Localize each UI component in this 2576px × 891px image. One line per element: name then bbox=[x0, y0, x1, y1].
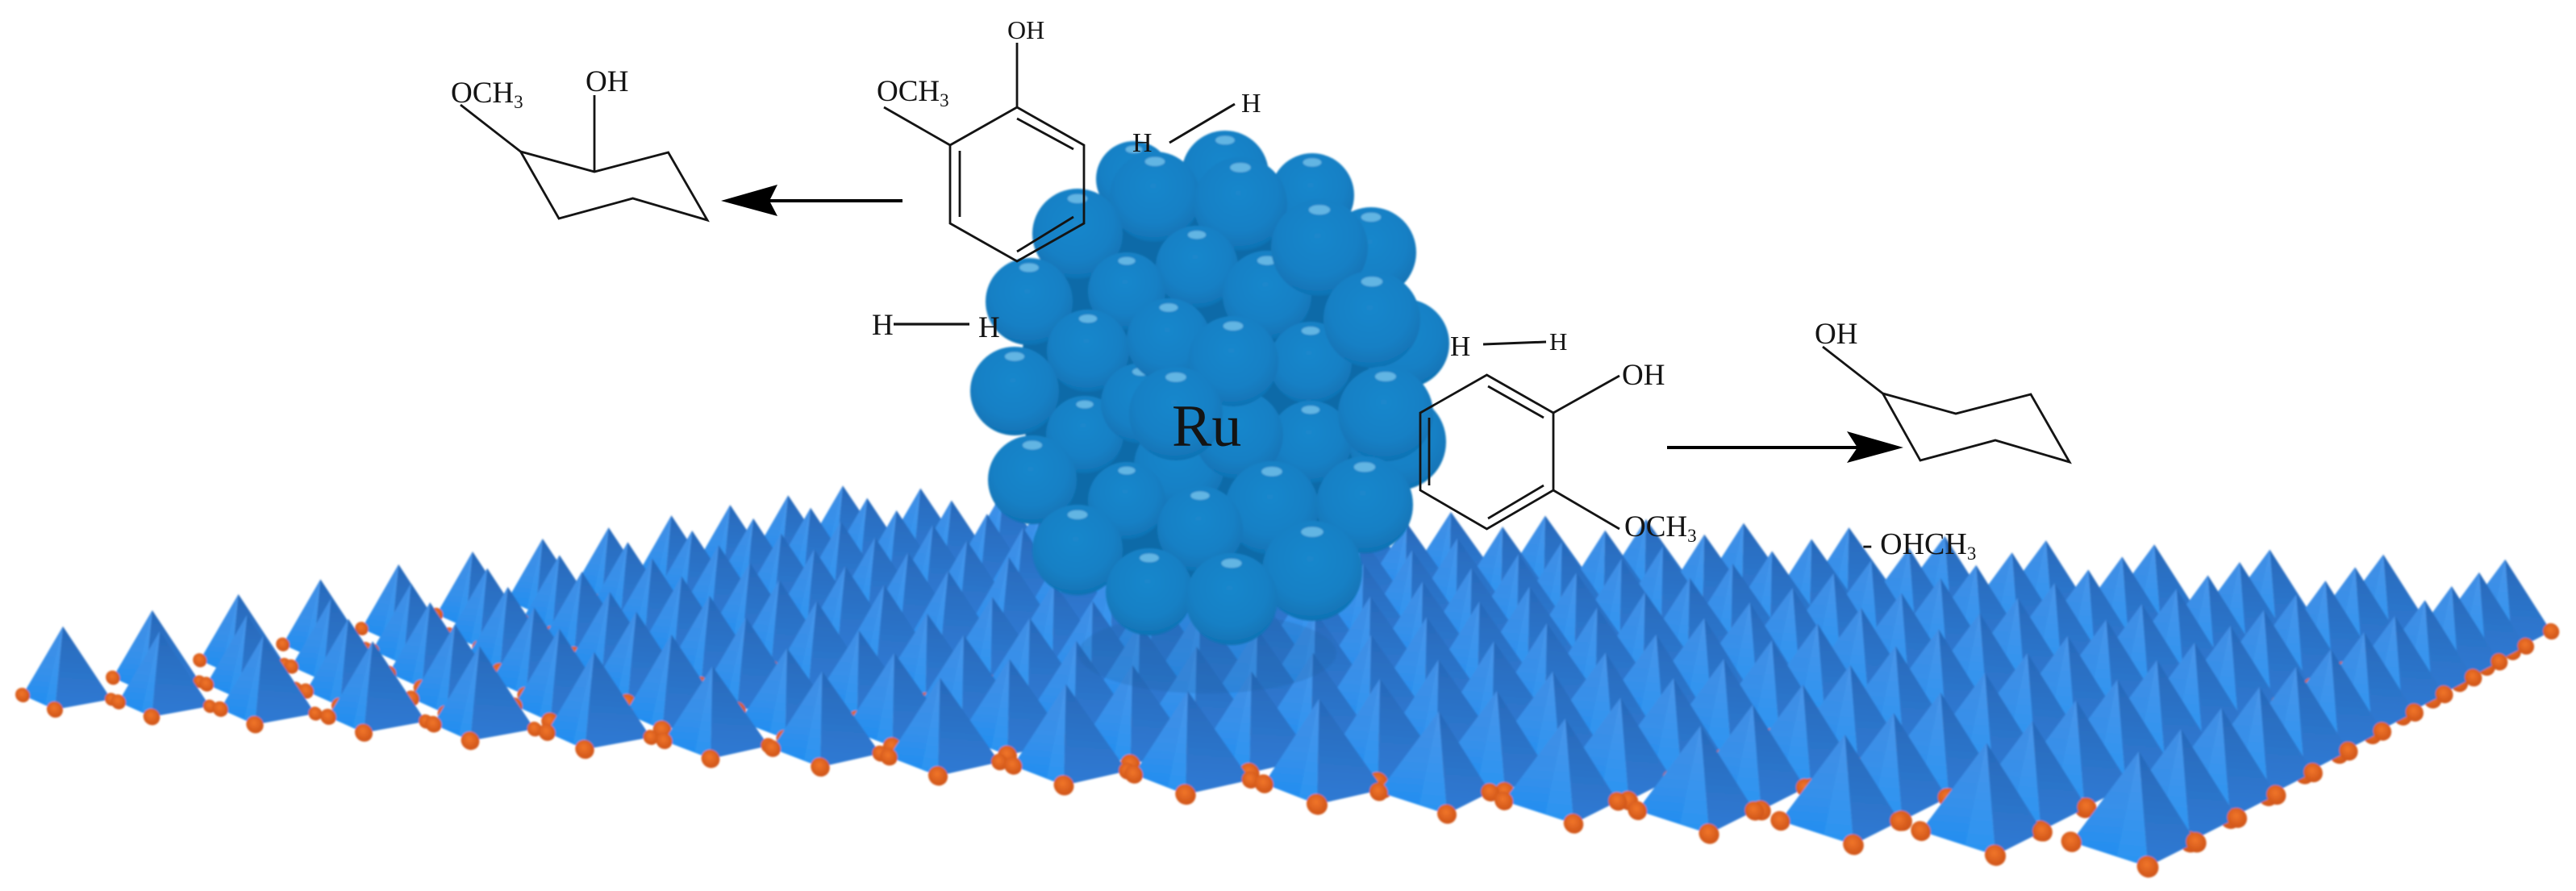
Ru nanoparticle cluster bbox=[970, 131, 1449, 645]
product: cyclohexanol (right) bbox=[1815, 318, 2070, 462]
H2 molecule: left bbox=[872, 309, 1000, 344]
H2 molecule: top: H bbox=[1241, 89, 1261, 119]
by-product label: - OHCH3: 3 bbox=[1967, 543, 1976, 564]
H2 molecule: right: H bbox=[1450, 331, 1470, 362]
reactant: guaiacol (top): OH bbox=[1007, 15, 1044, 44]
label: Ru: Ru bbox=[1172, 393, 1241, 460]
reactant: guaiacol (top): 3 bbox=[940, 90, 949, 110]
H2 molecule: top: H bbox=[1132, 128, 1153, 158]
arrow: guaiacol to cyclohexanol bbox=[1667, 431, 1903, 463]
shadow under Ru cluster bbox=[1078, 613, 1336, 693]
reactant: guaiacol (top): OCH bbox=[877, 75, 940, 108]
product: methoxycyclohexanol (left): OH bbox=[586, 65, 628, 98]
H2 molecule: top bbox=[1132, 89, 1261, 158]
H2 molecule: left: H bbox=[872, 309, 894, 342]
product: methoxycyclohexanol (left): 3 bbox=[514, 92, 523, 112]
reactant: guaiacol (right): 3 bbox=[1687, 526, 1697, 546]
pyramid lattice support with orange atoms bbox=[15, 459, 2559, 882]
reactant: guaiacol (right) bbox=[1420, 359, 1697, 546]
reactant: guaiacol (top) bbox=[877, 15, 1084, 261]
reactant: guaiacol (right): OH bbox=[1622, 359, 1665, 392]
product: methoxycyclohexanol (left): OCH bbox=[451, 77, 514, 110]
product: methoxycyclohexanol (left) bbox=[451, 65, 707, 220]
by-product label: - OHCH3: - OHCH bbox=[1862, 527, 1967, 561]
reactant: guaiacol (right): OCH bbox=[1624, 510, 1687, 543]
product: cyclohexanol (right): OH bbox=[1815, 318, 1857, 351]
H2 molecule: right: H bbox=[1549, 327, 1567, 356]
H2 molecule: left: H bbox=[978, 311, 1000, 344]
arrow: guaiacol to methoxycyclohexanol bbox=[721, 185, 902, 216]
H2 molecule: right bbox=[1450, 327, 1567, 362]
